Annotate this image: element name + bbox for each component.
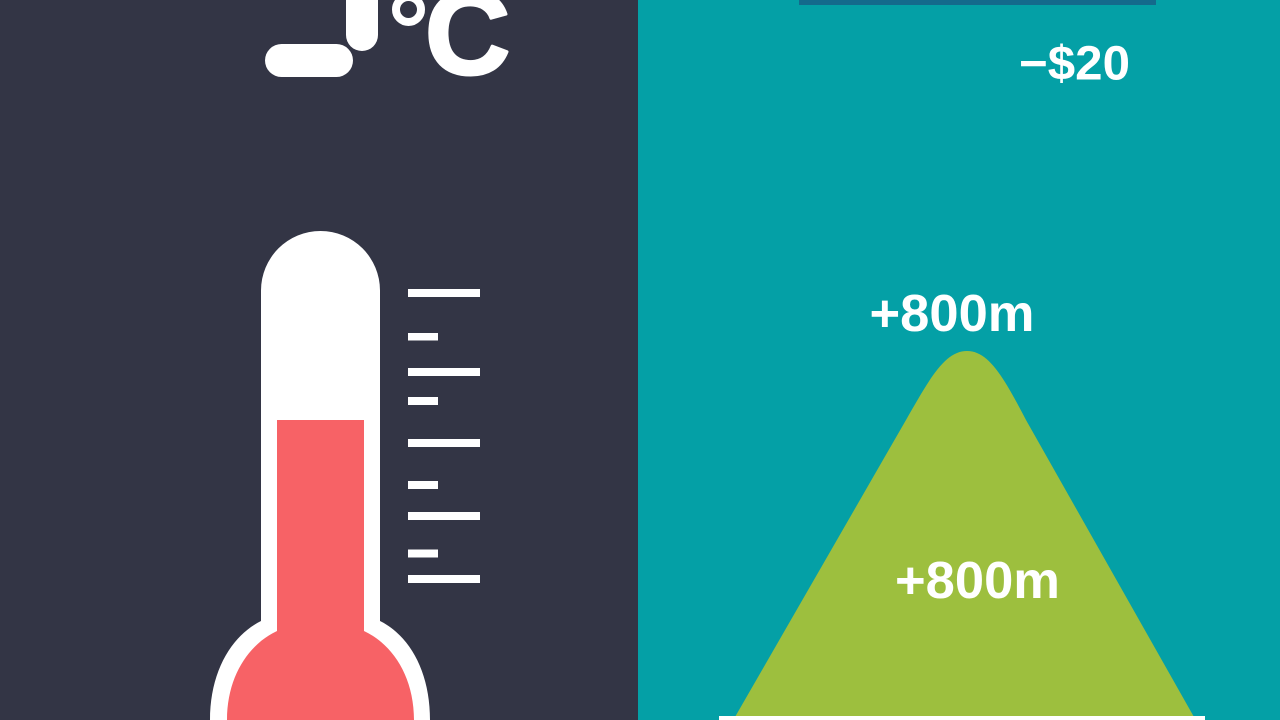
label: elevation above mountain: +800m [870, 285, 1034, 343]
mountain baseline [719, 716, 1205, 720]
panel: cost and elevation [638, 0, 1280, 720]
label: elevation inside mountain: +800m [895, 552, 1060, 610]
thermometer scale ticks [408, 289, 480, 583]
icon: mountain [735, 351, 1194, 717]
top bar [799, 0, 1156, 5]
heading: minus one degree celsius [265, 0, 510, 100]
panel: temperature [0, 0, 638, 720]
label: minus 20 dollars: −$20 [1019, 38, 1130, 90]
icon: thermometer [210, 231, 430, 720]
